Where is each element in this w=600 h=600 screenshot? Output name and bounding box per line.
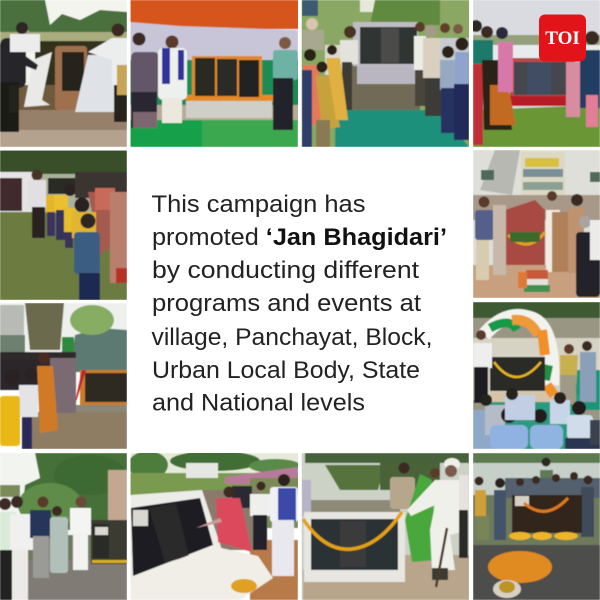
photo: people by tree and plaque (0, 303, 127, 449)
men in white (0, 496, 34, 600)
man in white behind (493, 205, 506, 275)
man with white shirt (31, 170, 47, 238)
woman in grey dress (50, 506, 68, 573)
crowd behind the memorial (473, 195, 600, 220)
woman in orange saree (37, 352, 58, 433)
women at right of line (75, 172, 127, 283)
photo: woman inspecting large plaque with flowers (128, 451, 301, 600)
white banner with dark plaque (0, 172, 33, 212)
seated students in blue uniform (473, 388, 600, 449)
rangoli (488, 551, 552, 583)
striped tent (225, 467, 298, 484)
dark plaque with garland (490, 357, 545, 391)
woman in white at edge (590, 220, 600, 260)
woman in red saree (196, 486, 252, 552)
men and boys at right (414, 22, 469, 140)
yellow lamps (509, 532, 578, 540)
plaque with orange border (75, 370, 127, 405)
plaque with garland (512, 495, 582, 533)
women at left (470, 20, 516, 145)
white cloth (24, 52, 52, 107)
woman in black burqa (576, 216, 600, 297)
man in white shirt (473, 330, 492, 403)
poster (108, 470, 127, 520)
man in white with blue stole (158, 36, 187, 123)
boy with yellow scarf (72, 198, 96, 238)
photo: CISF personnel at red memorial plaque (473, 150, 600, 298)
plaque on red base (510, 58, 575, 106)
boy in yellow shirt (474, 476, 489, 540)
children in colourful clothes (302, 0, 358, 147)
black plaque with gold text panels (131, 498, 213, 576)
stone plaque (55, 46, 87, 110)
teacher and students row (494, 458, 600, 540)
balloon arch (484, 316, 552, 385)
white building (186, 463, 218, 478)
tree trunk (25, 303, 64, 350)
marigold garland (303, 512, 402, 549)
photo: officials beside plaque and poster (0, 453, 127, 600)
man in white shirt and black trousers (250, 482, 270, 550)
man behind (9, 22, 41, 53)
tricolour box (518, 270, 550, 292)
text block: campaign statement: This campaign has (152, 191, 366, 218)
TOI logo: TOI (545, 28, 580, 49)
children in yellow (45, 178, 77, 248)
white plinth (186, 95, 274, 118)
woman in dark saree (131, 32, 159, 128)
white plaque frame (304, 512, 405, 582)
photo: children in yellow lined up at plaque (0, 150, 127, 300)
text block: campaign statement: promoted ‘Jan Bhagidari’ (152, 224, 447, 251)
red memorial with garland (505, 200, 545, 265)
plaque (91, 520, 127, 564)
photo: plaque unveiling by men in suit and white (0, 0, 127, 147)
white framed plaque (353, 22, 418, 66)
black plaques with orange border (192, 56, 262, 99)
photo: people beside plaque under tricolour (130, 0, 300, 147)
man in white at right (88, 24, 127, 122)
text block: campaign statement: programs and events at (152, 290, 421, 317)
photo: students with plaque and rangoli (473, 453, 600, 600)
text block: campaign statement: by conducting different (152, 257, 419, 284)
boy in yellow t-shirt (0, 395, 21, 447)
woman in green saree (405, 468, 440, 562)
text block: campaign statement: Urban Local Body, State (152, 357, 420, 384)
white flower platform (130, 546, 273, 600)
dark haired crowd (0, 352, 76, 413)
elderly man in white with turban (407, 458, 468, 587)
white cloth (75, 55, 116, 112)
man in dark suit (0, 29, 38, 132)
plate offering (493, 580, 521, 598)
man in beige shirt (390, 462, 415, 509)
white plaque frame (130, 490, 222, 585)
banner (521, 152, 565, 198)
text block: campaign statement: and National levels (152, 390, 365, 416)
uniformed personnel in camouflage (546, 191, 584, 273)
man in grey shirt (475, 196, 494, 280)
man in white at right (70, 496, 91, 570)
women at right (560, 341, 596, 405)
women at right (566, 31, 600, 127)
child in white (18, 384, 39, 449)
man in navy shirt (30, 496, 51, 578)
photo: elderly man beside plaque with marigold garland (301, 453, 471, 600)
text block: campaign statement: village, Panchayat, Block, (152, 324, 432, 351)
photo: school girls before plaque under balloon arch (470, 302, 600, 449)
photo: women beside plaque by the lake (470, 0, 600, 147)
man in checked shirt (273, 37, 298, 130)
TOI logo (539, 14, 586, 62)
man in white with blue stole (270, 474, 298, 576)
boy in blue shirt (74, 214, 100, 300)
text block: campaign statement (152, 191, 447, 416)
photo: plaque with school children (301, 0, 471, 147)
